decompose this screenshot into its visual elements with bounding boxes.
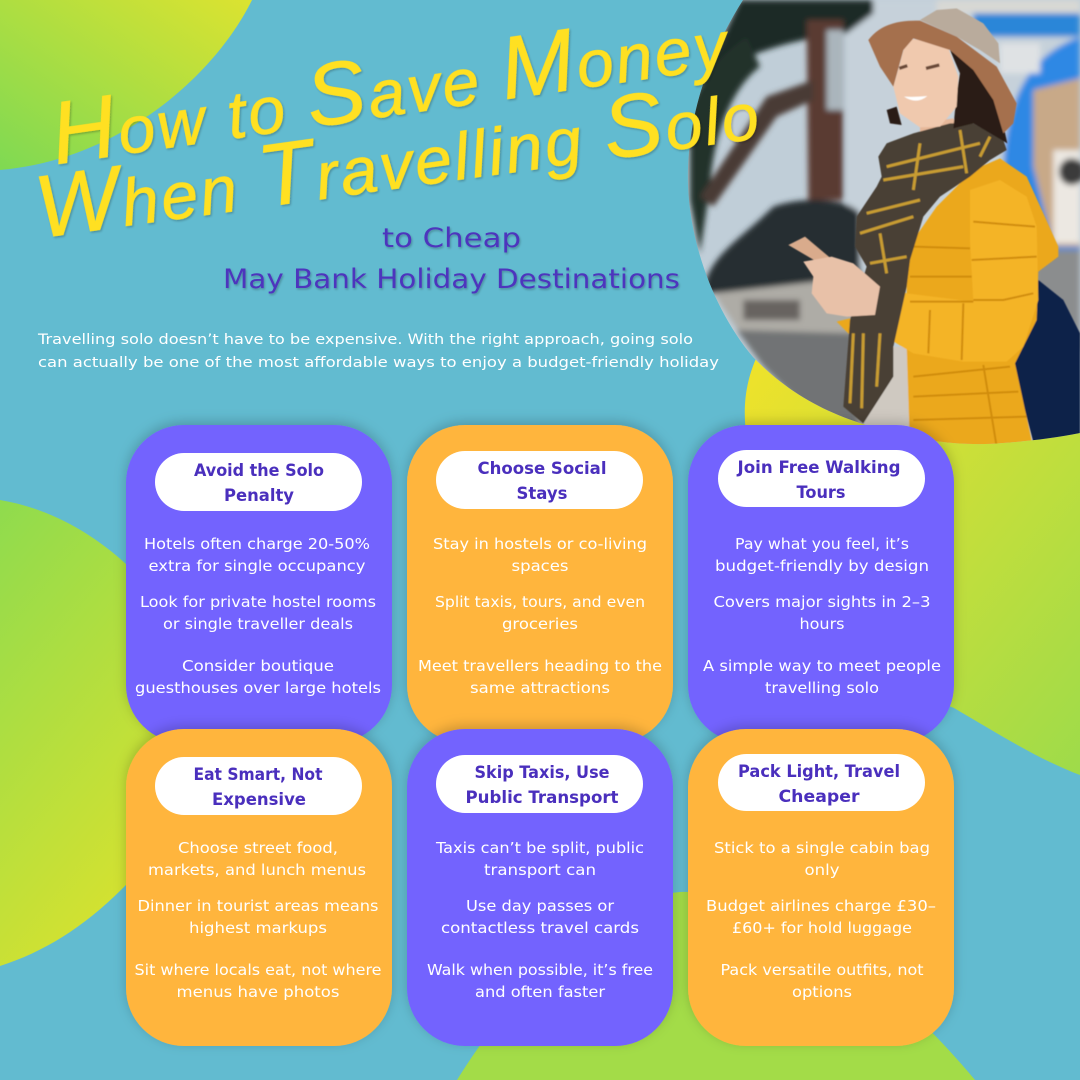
heading pill (436, 451, 643, 509)
tips: same attractions (470, 679, 610, 697)
tips: and often faster (475, 983, 606, 1001)
tips: Pack versatile outfits, not (720, 961, 924, 979)
jacket body (907, 158, 1058, 448)
tips (703, 535, 941, 697)
tips: extra for single occupancy (148, 557, 366, 575)
heading pill (718, 754, 925, 811)
tips: contactless travel cards (441, 919, 639, 937)
backpack (1013, 280, 1080, 448)
tips: Sit where locals eat, not where (134, 961, 382, 979)
intro text (37, 331, 719, 371)
tips: or single traveller deals (163, 615, 353, 633)
blob: lower left (0, 500, 191, 966)
tips: Stick to a single cabin bag (714, 839, 930, 857)
tips: groceries (502, 615, 578, 633)
panel: avoid the solo penalty (126, 425, 392, 743)
subtitle: to Cheap (382, 223, 521, 254)
tips (134, 839, 382, 1001)
tips (427, 839, 653, 1001)
tips (706, 839, 936, 1001)
tips: Hotels often charge 20-50% (144, 535, 370, 553)
tips: only (804, 861, 840, 879)
photo: woman in yellow jacket looking up (680, 0, 1080, 450)
tips: options (792, 983, 852, 1001)
sleeve (894, 180, 1040, 362)
tips: A simple way to meet people (703, 657, 941, 675)
heading pill: Cheaper (778, 787, 860, 806)
heading pill: Expensive (212, 790, 306, 809)
tips: Split taxis, tours, and even (435, 593, 645, 611)
tips: menus have photos (176, 983, 340, 1001)
panel: eat smart (126, 729, 392, 1046)
tips: Covers major sights in 2–3 (714, 593, 930, 611)
tips: spaces (512, 557, 569, 575)
heading pill: Skip Taxis, Use (474, 763, 610, 782)
phone (788, 237, 847, 273)
inner coat (860, 347, 912, 433)
face (893, 38, 958, 127)
tips: Choose street food, (178, 839, 338, 857)
tips: Budget airlines charge £30– (706, 897, 936, 915)
heading pill (155, 757, 362, 815)
heading pill: Public Transport (466, 788, 619, 807)
tips: Consider boutique (182, 657, 334, 675)
tips: Meet travellers heading to the (418, 657, 662, 675)
tips: Use day passes or (466, 897, 615, 915)
tips: Walk when possible, it’s free (427, 961, 653, 979)
blob: bottom (457, 892, 975, 1080)
tips: Stay in hostels or co-living (433, 535, 647, 553)
intro text: Travelling solo doesn’t have to be expensive. With the right approach, going solo (37, 331, 693, 348)
tips: budget-friendly by design (715, 557, 929, 575)
heading pill: Avoid the Solo (194, 461, 324, 480)
tips (418, 535, 662, 697)
heading pill: Choose Social (478, 459, 606, 478)
hand (803, 257, 880, 317)
panel: join free walking tours (688, 425, 954, 743)
heading pill: Eat Smart, Not (194, 765, 323, 784)
neck (920, 118, 958, 148)
tips: Taxis can’t be split, public (435, 839, 644, 857)
blob: right (745, 350, 1080, 775)
panel: skip taxis (407, 729, 673, 1046)
heading pill (718, 450, 925, 507)
tips: Pay what you feel, it’s (735, 535, 909, 553)
tips: transport can (484, 861, 596, 879)
heading pill: Join Free Walking (736, 458, 900, 477)
intro text: can actually be one of the most affordable ways to enjoy a budget-friendly holiday (38, 354, 719, 371)
photo background scene (690, 0, 1080, 450)
heading pill: Penalty (224, 486, 294, 505)
tips: Dinner in tourist areas means (138, 897, 379, 915)
title: How to Save Money (45, 0, 736, 183)
tips: markets, and lunch menus (148, 861, 366, 879)
tips: guesthouses over large hotels (135, 679, 381, 697)
photo subject (788, 8, 1080, 448)
hat (868, 21, 1017, 133)
heading pill: Stays (516, 484, 568, 503)
title: When Travelling Solo (29, 59, 764, 257)
tips: hours (800, 615, 845, 633)
blob: top left (0, 0, 252, 170)
panel: pack light (688, 729, 954, 1046)
heading pill: Tours (796, 483, 846, 502)
subtitle: May Bank Holiday Destinations (223, 264, 680, 295)
panel: choose social stays (407, 425, 673, 743)
heading pill (155, 453, 362, 511)
tips: travelling solo (765, 679, 879, 697)
hair (887, 50, 1007, 143)
scarf (843, 123, 1007, 423)
tips (135, 535, 381, 697)
tips: highest markups (189, 919, 327, 937)
subtitle (223, 223, 680, 295)
tips: £60+ for hold luggage (732, 919, 912, 937)
heading pill: Pack Light, Travel (738, 762, 900, 781)
tips: Look for private hostel rooms (140, 593, 376, 611)
heading pill (436, 755, 643, 813)
